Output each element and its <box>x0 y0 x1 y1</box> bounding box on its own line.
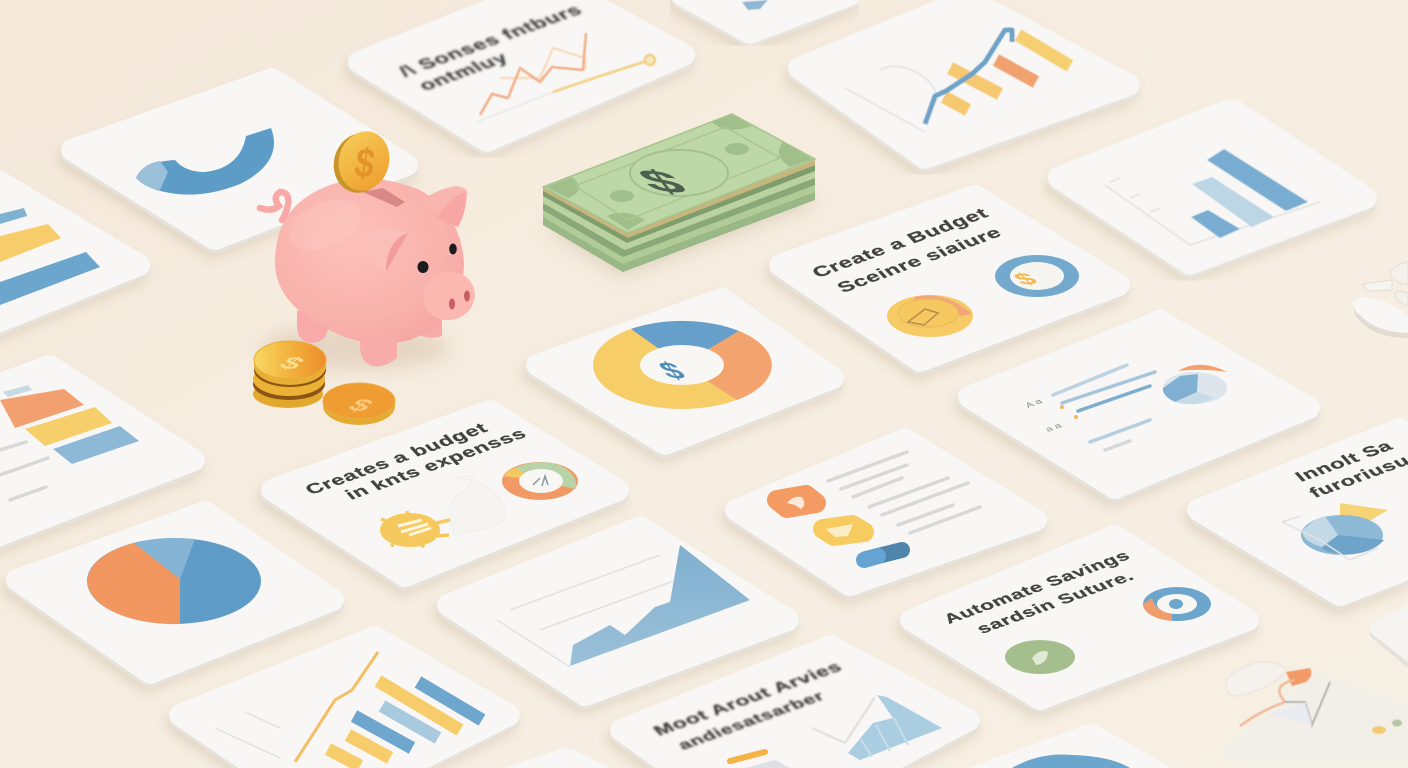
chart: bars <box>0 208 100 305</box>
chart: area <box>570 545 750 666</box>
panel: bottom edge card <box>505 748 610 768</box>
text lines <box>828 452 980 533</box>
flat coin: $ <box>342 395 380 415</box>
chart: axes <box>1105 178 1320 245</box>
chart: small bar <box>730 752 790 768</box>
heading: top card text: /\ Sonses fntburs <box>395 2 587 80</box>
bill corners <box>546 115 812 230</box>
flat coin <box>323 383 395 425</box>
snout <box>416 265 482 327</box>
chart: green orange donut <box>502 462 578 500</box>
chart: pie <box>87 538 261 624</box>
icon: white pieces top right <box>1354 262 1408 338</box>
panel: area chart card <box>445 527 788 703</box>
eyes <box>418 244 457 273</box>
heading: creates a budget: Creates a budget <box>301 420 492 498</box>
chart: three bars <box>1191 149 1308 238</box>
coin stack <box>253 341 326 408</box>
heading: automate savings: Automate Savings <box>939 547 1134 626</box>
icon: blue capsule <box>864 550 902 560</box>
chart: bars <box>944 35 1070 110</box>
chart: grid <box>497 555 690 667</box>
chart: stepped bars <box>0 385 139 464</box>
icon: cash stack <box>543 114 818 276</box>
back legs <box>297 310 442 343</box>
icon: ring <box>1143 587 1211 621</box>
chart: trend line <box>295 652 378 762</box>
heading: top card text: ontmluy <box>415 50 513 94</box>
heading: most about: Moot Arout Arvies <box>650 659 847 739</box>
chart: blue pie <box>1301 503 1388 555</box>
icon: yellow gear <box>380 511 450 547</box>
highlight <box>281 189 369 261</box>
chart: trend line <box>812 697 875 743</box>
near ear <box>368 228 408 272</box>
panel: half donut card <box>69 79 407 247</box>
heading: most about: andiesatsarber <box>674 688 828 752</box>
heading: create a budget: Sceinre siaiure <box>833 224 1006 296</box>
body <box>275 179 464 344</box>
heading: creates a budget: in knts expensss <box>341 425 531 503</box>
small labels: a a <box>1043 422 1065 434</box>
icon: white blob <box>1226 662 1285 696</box>
panel: most about card <box>618 646 969 768</box>
bill seal <box>630 150 728 196</box>
heading: create a budget: Create a Budget <box>808 205 993 281</box>
chart: bars <box>328 681 482 766</box>
panel: creates a budget card <box>269 411 618 584</box>
chart: pie fragment <box>1012 755 1130 768</box>
panel: top line chart card <box>356 0 684 149</box>
coin stack: $ <box>273 353 311 373</box>
heading: insight: Innolt Sa <box>1291 438 1397 485</box>
panel: right edge card <box>1369 604 1408 668</box>
panel: bottom right faint card <box>1226 662 1402 760</box>
icon: green pill <box>1005 640 1075 674</box>
text lines <box>1053 365 1155 450</box>
icon: orange blob <box>777 495 816 509</box>
panel: left bars card <box>0 181 139 331</box>
panel: automate savings card <box>908 536 1248 707</box>
tail <box>260 192 288 220</box>
floor shadow <box>260 326 450 370</box>
icon: yellow gauge <box>887 295 973 337</box>
panel: top edge small card <box>679 0 850 41</box>
bill inner border <box>575 127 780 220</box>
icon: blue dollar ring: $ <box>1008 269 1043 288</box>
chart: route line <box>1240 680 1330 726</box>
far ear <box>422 186 467 227</box>
dollar sign: $ <box>629 162 696 201</box>
bill top <box>543 114 815 233</box>
icon: blue dollar ring <box>995 255 1079 297</box>
slot <box>363 188 405 207</box>
small labels: A a <box>1023 397 1045 410</box>
falling coin: $ <box>351 141 378 188</box>
faint axis <box>1282 516 1378 560</box>
front leg <box>360 335 397 366</box>
icon: piggy bank <box>253 126 482 425</box>
panel: bottom pie card <box>968 724 1172 768</box>
chart: mini pie <box>1163 365 1227 404</box>
small labels <box>1023 397 1078 434</box>
panel: left stacked card <box>0 366 194 544</box>
faint illustration <box>449 476 506 535</box>
panel: bar and trend card <box>177 637 509 766</box>
panel: pie chart card <box>14 512 333 681</box>
text lines <box>0 442 48 500</box>
line chart: orange trend <box>477 33 655 122</box>
chart: blue line <box>925 30 1012 124</box>
bill dots <box>610 143 749 202</box>
heading: automate savings: sardsin Suture. <box>972 568 1138 636</box>
heading: insight <box>1291 438 1408 501</box>
shadow under cash <box>545 160 818 276</box>
chart: donut <box>593 321 772 409</box>
panel: icon list card <box>733 439 1036 593</box>
panel: center donut card <box>534 299 833 452</box>
panel: line and bars card <box>796 0 1129 166</box>
panel: create a budget card <box>777 196 1119 369</box>
panel: insight pie card <box>1195 429 1408 603</box>
panel: list and pie card <box>966 321 1309 496</box>
bill layers <box>543 160 815 272</box>
chart: faint axis <box>845 66 936 132</box>
chart: half donut <box>136 128 274 195</box>
falling coin <box>327 126 396 199</box>
dots <box>1372 720 1402 734</box>
chart: axes <box>215 712 280 758</box>
chart: striped area <box>848 695 942 760</box>
panel: bar chart card <box>1056 109 1366 272</box>
icon: yellow blob <box>823 524 864 537</box>
chart: donut: $ <box>652 357 691 384</box>
nostrils <box>449 290 470 310</box>
chart fragment <box>742 0 768 10</box>
icon: orange tag <box>1286 668 1311 686</box>
